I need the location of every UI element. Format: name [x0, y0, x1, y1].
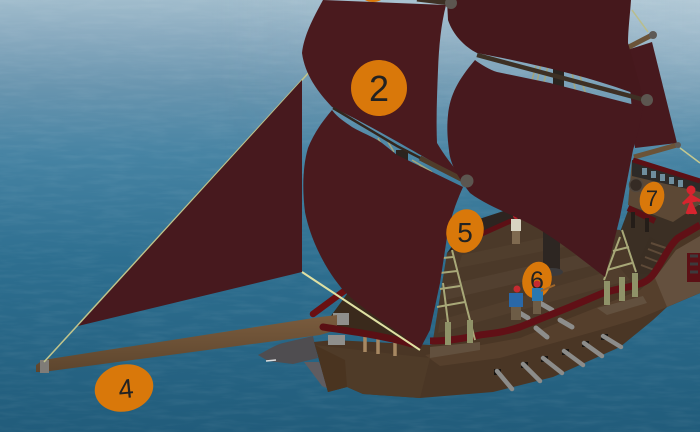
- label partly hidden at top: [363, 0, 383, 2]
- rigging ropes: [44, 2, 372, 362]
- main top sail: [447, 0, 643, 97]
- lookout pirate on far deck: [511, 213, 521, 244]
- pirate: musketeer overlapping label 6: [532, 280, 555, 314]
- label 2: [351, 60, 407, 116]
- rail figures: [445, 273, 638, 345]
- channel platforms: [430, 296, 647, 358]
- yard end caps: [445, 0, 653, 188]
- bow posts: [328, 313, 395, 356]
- stern wall: [655, 236, 700, 307]
- fore yard: [333, 108, 463, 180]
- bow deck interior: [322, 290, 420, 347]
- masts and upper ratlines: [378, 64, 586, 175]
- ratlines rear: [604, 230, 636, 280]
- mizzen lower yard: [634, 145, 677, 157]
- stern balusters: [632, 160, 700, 192]
- stern rail: [633, 160, 700, 181]
- mizzen upper yard: [627, 35, 652, 48]
- ship wheel: [630, 178, 642, 192]
- bowsprit: [36, 315, 337, 372]
- lower fore sail: [303, 110, 463, 349]
- label 7: [636, 179, 668, 217]
- jib lower rope: [302, 272, 420, 350]
- gun ports: [494, 334, 608, 375]
- stern gallery window: [687, 253, 700, 282]
- jib sail: [78, 80, 302, 326]
- upper row of cannons: [518, 303, 572, 337]
- ratlines front: [437, 250, 475, 340]
- rear quarter deck: [620, 160, 700, 283]
- pirate: red skeleton: [683, 187, 700, 214]
- main mast foot: [541, 230, 563, 276]
- red gunwale rail: [430, 225, 700, 341]
- far bulwark: [447, 208, 520, 253]
- deck planks: [445, 250, 608, 300]
- label 2: 2: [369, 68, 389, 109]
- main top yard: [477, 55, 645, 100]
- main lower sail: [447, 60, 643, 277]
- shark: [258, 336, 331, 390]
- bow lower rail: [323, 327, 412, 344]
- mizzen mast and rigging behind sails: [627, 10, 700, 163]
- pirate: blue shirt: [509, 286, 523, 320]
- bow upper rail: [313, 283, 355, 314]
- stairs: [633, 237, 667, 274]
- label 5: [441, 205, 489, 257]
- label 6: [518, 258, 556, 302]
- main deck: [433, 208, 640, 340]
- ship hull: [314, 225, 700, 398]
- bow facets: [315, 345, 430, 398]
- label 5: 5: [457, 217, 473, 248]
- label 4: 4: [117, 373, 135, 405]
- upper hull planks: [425, 240, 700, 366]
- label 7: 7: [646, 186, 658, 211]
- gun deck cannons: [497, 336, 621, 389]
- label 4: [90, 359, 158, 417]
- top fore yard: [417, 0, 450, 3]
- bowsprit cap: [40, 360, 49, 373]
- label 6: 6: [530, 267, 544, 295]
- quarter deck front rail: [628, 208, 655, 221]
- mizzen sail: [627, 42, 677, 148]
- upper fore sail: [302, 0, 463, 178]
